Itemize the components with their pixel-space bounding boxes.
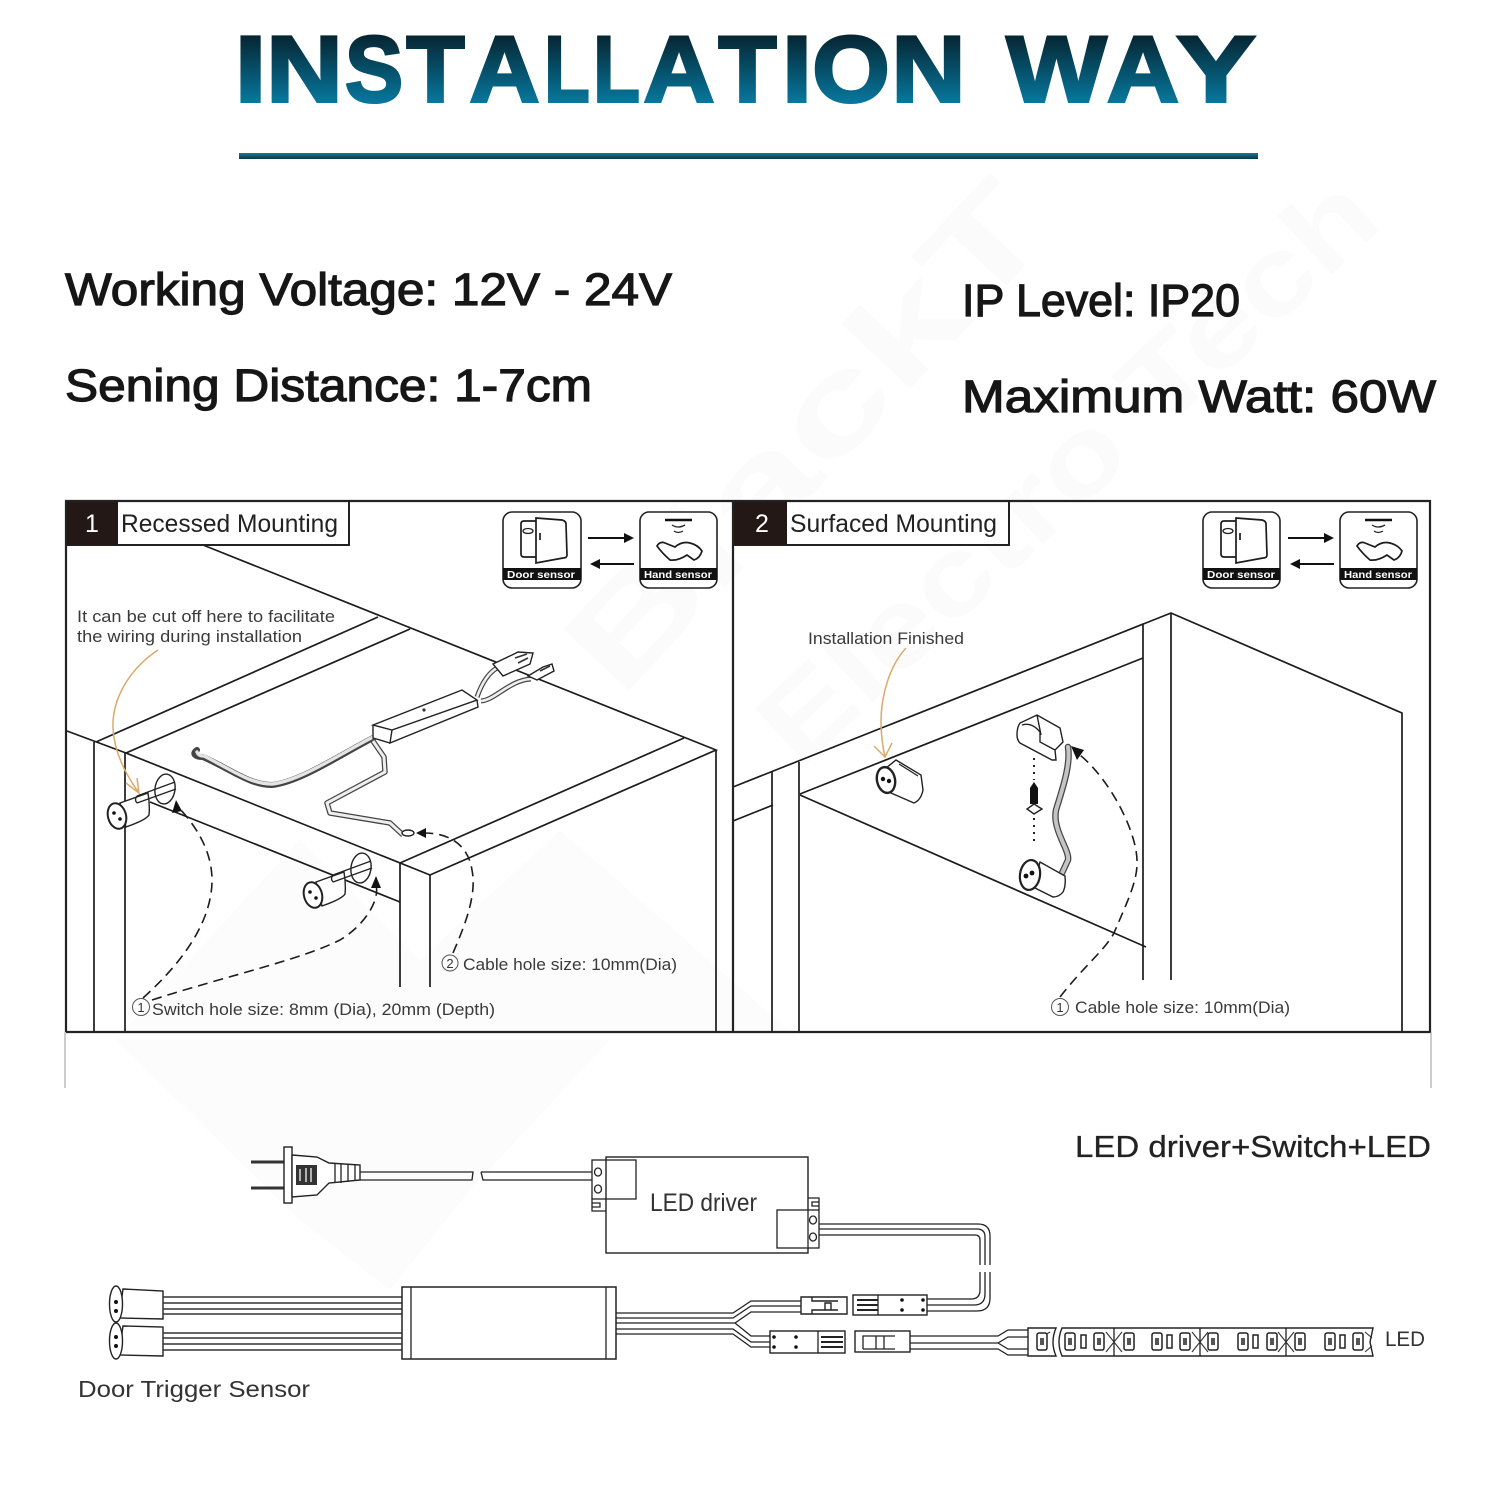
title: A: [1107, 16, 1179, 122]
heading tag: Recessed Mounting: [121, 510, 338, 538]
title underline: [239, 153, 1258, 159]
lower side guides: [65, 1032, 1431, 1088]
watermark: BlackT: [534, 151, 1077, 719]
panel frame: [66, 501, 1430, 1032]
mounted sensor: [874, 760, 923, 803]
panel: recessed mounting: [66, 501, 717, 1032]
panel: surfaced mounting: [733, 501, 1417, 1032]
title: I: [782, 16, 812, 122]
cabinet drawing: [733, 613, 1402, 1032]
watermark: Electro Tech: [732, 152, 1401, 788]
title: L: [544, 16, 590, 122]
spec: IP level: IP Level: IP20: [962, 275, 1240, 326]
heading tag: Surfaced Mounting: [790, 510, 997, 538]
cabinet drawing: [67, 545, 716, 1032]
LED driver box: [592, 1157, 819, 1253]
icon: hand sensor: [640, 512, 717, 588]
title: Y: [1176, 16, 1256, 122]
dashed arrows: [143, 800, 473, 1000]
mains cable: [360, 1172, 592, 1180]
LED label: LED: [1385, 1328, 1425, 1351]
icon: hand sensor: [1340, 512, 1417, 588]
sensor B: [301, 852, 373, 910]
label: configuration: LED driver+Switch+LED: [1075, 1129, 1431, 1164]
callout: cable hole: Cable hole size: 10mm(Dia): [1075, 999, 1290, 1017]
note: cut off: It can be cut off here to facilitate: [77, 608, 335, 626]
connector pair: bottom: [770, 1331, 910, 1353]
callout: cable hole: 2: [446, 956, 454, 971]
LED driver box: LED driver: [650, 1189, 757, 1217]
arrows between sensors: [588, 533, 634, 569]
heading tag: 1: [85, 510, 99, 538]
title: T: [406, 16, 464, 122]
title: [235, 16, 1256, 122]
title: L: [593, 16, 640, 122]
note: cut off: the wiring during installation: [77, 628, 302, 646]
power plug: [251, 1147, 360, 1203]
icon: hand sensor: Hand sensor: [1344, 570, 1412, 581]
note: installation finished: Installation Finished: [808, 630, 964, 648]
driver box with cables: [194, 652, 554, 836]
sensor label: Door Trigger Sensor: [78, 1376, 310, 1402]
icon: hand sensor: Hand sensor: [644, 570, 712, 581]
spec: working voltage: Working Voltage: 12V - 24V: [65, 264, 672, 315]
door trigger sensors: [110, 1286, 402, 1359]
wiring diagram: [78, 1129, 1431, 1402]
heading tag: [733, 501, 1009, 545]
cable with sensor: [1018, 747, 1069, 897]
callout: switch hole: Switch hole size: 8mm (Dia), 20mm (Depth): [152, 1001, 495, 1019]
sensor A: [105, 773, 177, 831]
orange arrow: [874, 648, 906, 757]
title: N: [266, 16, 343, 122]
spec: sensing distance: Sening Distance: 1-7cm: [65, 360, 592, 411]
connector pair: top: [801, 1295, 927, 1315]
output wires: [616, 1301, 802, 1347]
dashed arrow: [1060, 746, 1137, 997]
title: A: [644, 16, 714, 122]
LED strip: [1028, 1328, 1373, 1356]
output wire: [819, 1224, 990, 1311]
note: cut off: [77, 608, 335, 646]
wires to strip: [910, 1330, 1030, 1355]
icon: door sensor: Door sensor: [1207, 570, 1275, 581]
callout: cable hole: 1: [1056, 1000, 1064, 1015]
switch box: [402, 1287, 616, 1359]
title: I: [235, 16, 266, 122]
callout: cable hole: Cable hole size: 10mm(Dia): [463, 956, 677, 974]
heading tag: 2: [755, 510, 769, 538]
icon: door sensor: [503, 512, 581, 588]
arrows between sensors: [1288, 533, 1334, 569]
title: T: [718, 16, 776, 122]
callout: switch hole: 1: [137, 1000, 145, 1015]
title: N: [892, 16, 966, 122]
watermark: [115, 151, 1401, 1290]
title: S: [345, 16, 403, 122]
orange arrow: [113, 650, 158, 793]
mounting clip: [1017, 715, 1063, 760]
title: A: [470, 16, 540, 122]
spec: maximum watt: Maximum Watt: 60W: [962, 371, 1437, 422]
heading tag: [66, 501, 349, 545]
icon: door sensor: [1203, 512, 1280, 588]
icon: door sensor: Door sensor: [507, 570, 575, 581]
screw: [1027, 758, 1042, 845]
title: O: [812, 16, 890, 122]
title: W: [1006, 16, 1107, 122]
